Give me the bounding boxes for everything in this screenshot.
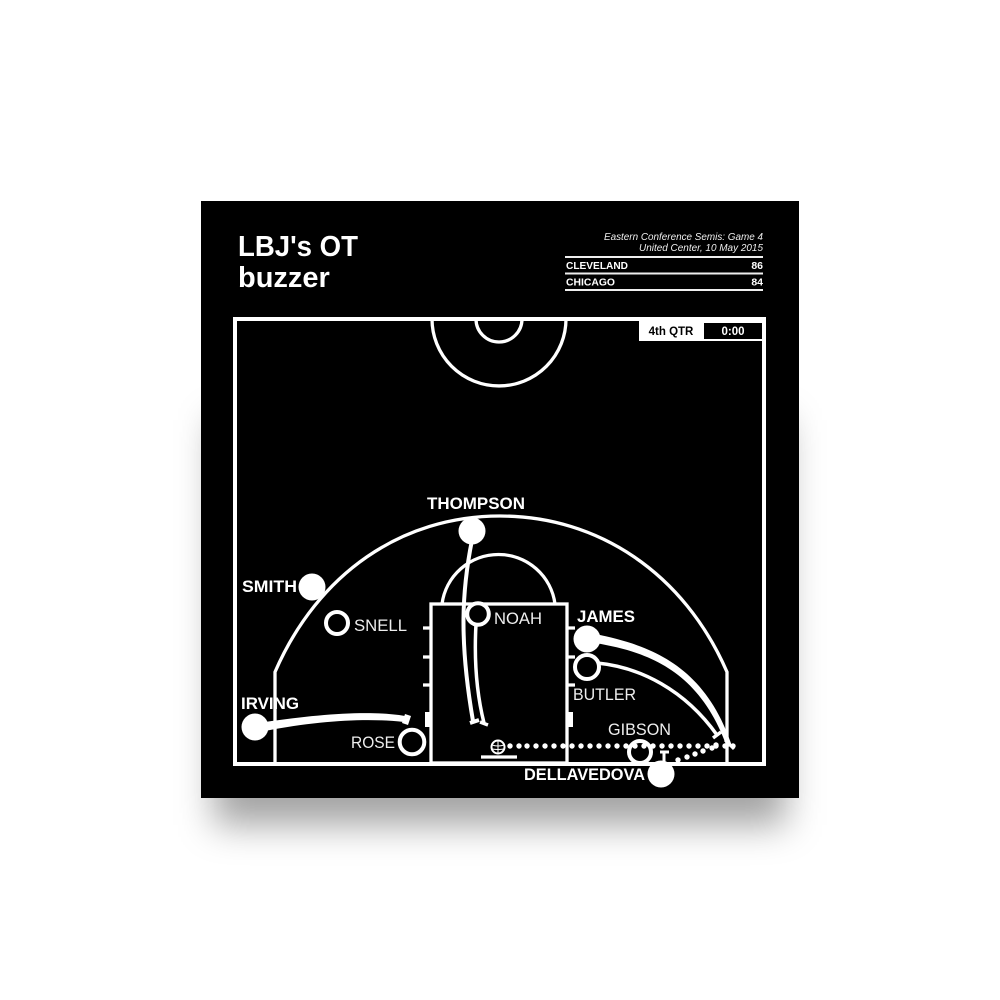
player: James: [574, 607, 635, 652]
icon: basketball: [492, 740, 504, 754]
movement: Irving end cap: [402, 714, 411, 725]
game info: Eastern Conference Semis: Game 4: [604, 231, 763, 243]
player: Irving: [241, 694, 299, 740]
quarter and clock box: 4th QTR: [649, 326, 694, 338]
dotted pass line: [507, 743, 736, 749]
movement: Irving: [265, 713, 405, 731]
player: Rose: [351, 730, 424, 754]
player: Rose: ROSE: [351, 733, 395, 752]
player: Dellavedova: DELLAVEDOVA: [524, 765, 645, 784]
score table: CHICAGO: [566, 276, 615, 288]
score table: 84: [751, 276, 763, 288]
player: Noah: [467, 603, 542, 628]
poster background: [201, 201, 799, 798]
poster shadow: [214, 420, 786, 825]
player: Smith: SMITH: [242, 577, 297, 596]
player: Gibson: GIBSON: [608, 720, 671, 739]
movement: Thompson: [463, 540, 479, 723]
dotted dribble path: [675, 742, 719, 763]
movement: James end cap: [725, 740, 734, 749]
score table: [565, 257, 763, 290]
lane blocks: [425, 712, 573, 727]
title: [238, 231, 358, 294]
player: Gibson: [608, 720, 671, 763]
player: Thompson: THOMPSON: [427, 494, 525, 513]
score table: 86: [751, 260, 763, 272]
player: Noah: NOAH: [494, 609, 542, 628]
player: Snell: [326, 612, 407, 635]
movement: Dellavedova: [660, 752, 669, 764]
movement: Noah: [475, 624, 488, 725]
player: Dellavedova: [524, 760, 674, 788]
player: James: JAMES: [577, 607, 635, 626]
title: LBJ's OT: [238, 231, 358, 263]
player: Irving: IRVING: [241, 694, 299, 713]
player: Butler: [573, 655, 636, 704]
quarter and clock box: 0:00: [721, 326, 745, 338]
player: Smith: [242, 574, 326, 600]
game info: United Center, 10 May 2015: [639, 242, 763, 254]
player: Butler: BUTLER: [573, 685, 636, 704]
game info: [604, 231, 763, 254]
quarter and clock box: [639, 321, 764, 341]
player: Snell: SNELL: [354, 616, 407, 635]
court lines: [235, 319, 764, 764]
title: buzzer: [238, 262, 330, 294]
movement: Butler: [597, 663, 721, 738]
player: Thompson: [427, 494, 525, 544]
score table: CLEVELAND: [566, 260, 628, 272]
movement: James: [595, 634, 732, 747]
